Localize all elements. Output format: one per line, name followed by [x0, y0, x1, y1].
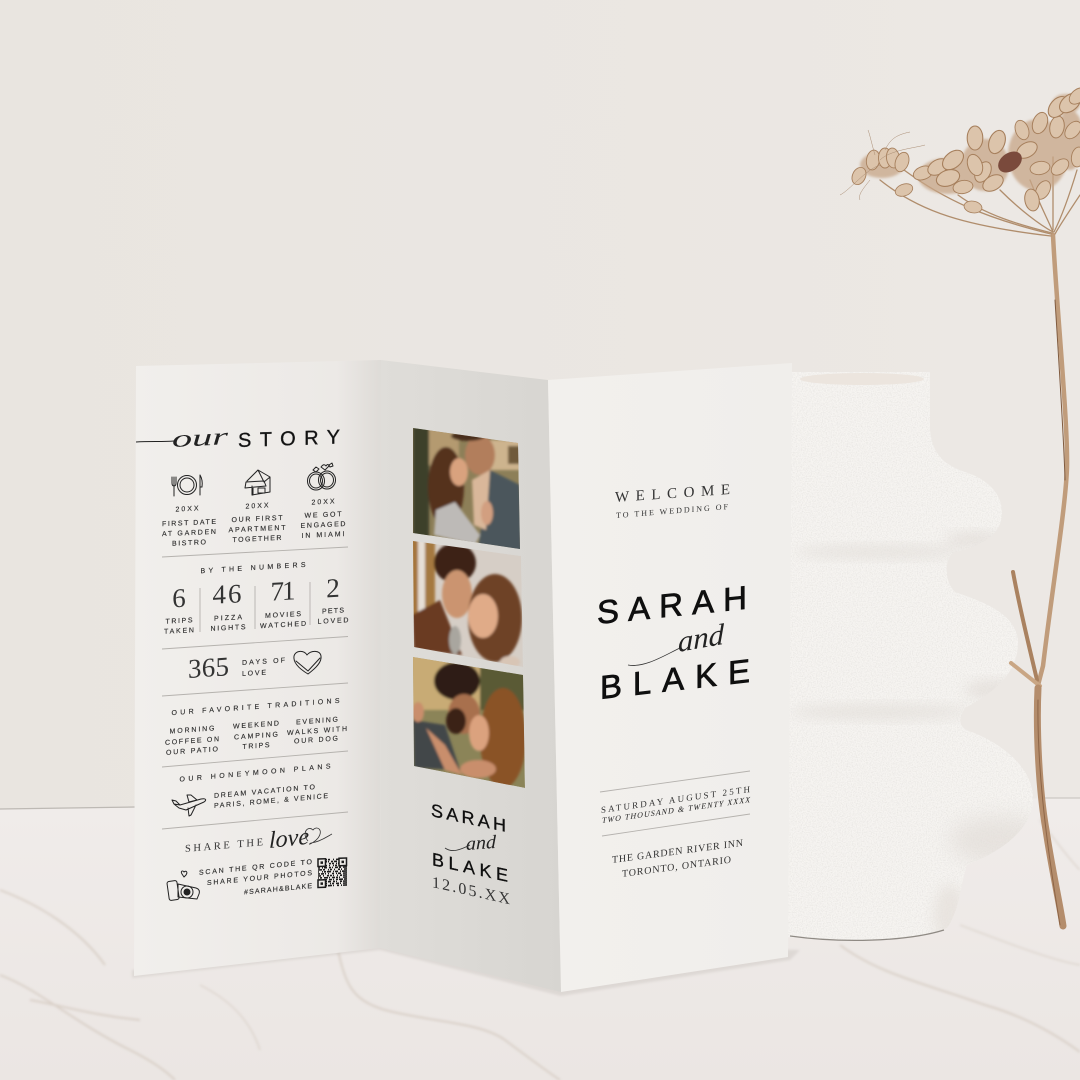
timeline item 3 — [300, 498, 346, 540]
names block: and — [466, 832, 497, 855]
timeline item 2: TOGETHER — [232, 535, 282, 544]
tradition 3: WALKS WITH — [287, 726, 347, 737]
icon: wedding rings — [308, 463, 336, 490]
panel: our story — [134, 360, 381, 976]
icon: house — [245, 470, 270, 495]
timeline item 2: 20XX — [246, 502, 269, 511]
stat: pizza nights — [210, 578, 246, 633]
heading: our story: STORY — [238, 426, 340, 452]
stat: pets loved: 2 — [326, 573, 340, 603]
photo 3 — [410, 655, 530, 788]
honeymoon text — [214, 784, 328, 810]
names block: BLAKE — [432, 849, 508, 886]
stat: pets loved: LOVED — [318, 617, 348, 626]
couple names: and — [678, 617, 725, 659]
icon: camera — [167, 871, 199, 901]
heading: share the love — [185, 824, 332, 855]
background wall — [0, 0, 1080, 815]
venue: TORONTO, ONTARIO — [622, 855, 731, 880]
stat: pets loved: PETS — [322, 607, 344, 616]
tradition 3 — [287, 717, 347, 746]
venue: THE GARDEN RIVER INN — [612, 838, 744, 866]
timeline item 3: IN MIAMI — [302, 531, 345, 540]
stat: trips taken: TAKEN — [164, 627, 194, 636]
tradition 1: COFFEE ON — [165, 736, 219, 747]
date: SATURDAY AUGUST 25TH — [601, 784, 750, 815]
qr instructions: SHARE YOUR PHOTOS — [207, 870, 312, 887]
timeline item 1: AT GARDEN — [162, 529, 216, 538]
tradition 3: OUR DOG — [294, 735, 338, 746]
timeline item 3: ENGAGED — [300, 521, 346, 530]
names block — [431, 800, 510, 908]
photo 1 — [413, 425, 525, 552]
icon: heart — [294, 651, 321, 674]
stat: trips taken — [164, 583, 194, 636]
tradition 1: OUR PATIO — [166, 746, 219, 757]
QR code — [318, 858, 347, 888]
tradition 2: CAMPING — [234, 731, 278, 742]
stat: pizza nights: PIZZA — [214, 614, 242, 623]
plant seed heads — [840, 85, 1080, 214]
couple names: BLAKE — [600, 653, 750, 707]
tradition 1: MORNING — [170, 725, 214, 736]
couple names: SARAH — [597, 580, 747, 632]
vase — [788, 372, 1033, 941]
stat: movies watched: WATCHED — [260, 621, 306, 630]
heading: our story — [136, 424, 340, 453]
heading: share the love: SHARE THE — [185, 837, 263, 855]
qr instructions: SCAN THE QR CODE TO — [199, 859, 313, 877]
stat: movies watched — [260, 575, 306, 630]
heading: share the love: love — [269, 824, 309, 854]
date: TWO THOUSAND & TWENTY XXXX — [602, 795, 751, 825]
heading: favorite traditions: OUR FAVORITE TRADITIONS — [172, 698, 340, 717]
honeymoon text: DREAM VACATION TO — [214, 784, 316, 800]
tradition 2 — [233, 720, 279, 751]
timeline item 2 — [228, 502, 286, 544]
welcome heading — [615, 482, 730, 520]
plant stems — [1011, 235, 1067, 926]
stat: trips taken: 6 — [172, 583, 186, 613]
stat: movies watched: MOVIES — [265, 611, 301, 620]
stat: pets loved — [318, 573, 348, 626]
names block: 12.05.XX — [432, 873, 510, 908]
stat: pizza nights: 46 — [212, 578, 242, 610]
timeline item 2: OUR FIRST — [232, 515, 283, 524]
panel: welcome cover — [548, 363, 792, 992]
dried plant — [840, 85, 1080, 926]
names block: SARAH — [431, 800, 506, 836]
timeline item 1 — [162, 505, 216, 548]
marble table — [0, 798, 1080, 1080]
tradition 1 — [165, 725, 219, 757]
stat: 365 days of love — [188, 651, 321, 684]
photo 2 — [410, 538, 523, 668]
stat: trips taken: TRIPS — [166, 617, 193, 626]
qr instructions — [199, 859, 313, 897]
stat: pizza nights: NIGHTS — [210, 624, 246, 633]
welcome heading: TO THE WEDDING OF — [616, 502, 729, 520]
plant rays — [880, 157, 1080, 236]
timeline item 1: 20XX — [176, 505, 199, 514]
tradition 2: TRIPS — [242, 742, 270, 751]
heading: honeymoon plans: OUR HONEYMOON PLANS — [180, 763, 331, 784]
timeline item 3: WE GOT — [304, 511, 342, 520]
tradition 2: WEEKEND — [233, 720, 279, 731]
honeymoon text: PARIS, ROME, & VENICE — [214, 793, 328, 810]
qr instructions: #SARAH&BLAKE — [244, 883, 312, 897]
heading: by the numbers: BY THE NUMBERS — [201, 562, 306, 575]
icon: airplane — [172, 795, 206, 816]
stat: 365 days of love: DAYS OF — [242, 657, 285, 667]
panel: photo strip — [380, 360, 561, 992]
welcome heading: WELCOME — [615, 482, 730, 506]
timeline item 3: 20XX — [312, 498, 335, 507]
panel shadow — [132, 940, 800, 996]
stat: movies watched: 71 — [270, 575, 296, 607]
couple names — [597, 580, 750, 707]
timeline item 2: APARTMENT — [228, 525, 286, 534]
stat: 365 days of love: 365 — [188, 651, 229, 684]
icon: plate and cutlery — [172, 475, 202, 496]
tradition 3: EVENING — [296, 717, 338, 726]
heading: our story: our — [172, 424, 229, 453]
timeline item 1: FIRST DATE — [162, 519, 216, 528]
venue — [612, 838, 744, 880]
timeline item 1: BISTRO — [172, 539, 207, 548]
stat: 365 days of love: LOVE — [242, 670, 266, 678]
